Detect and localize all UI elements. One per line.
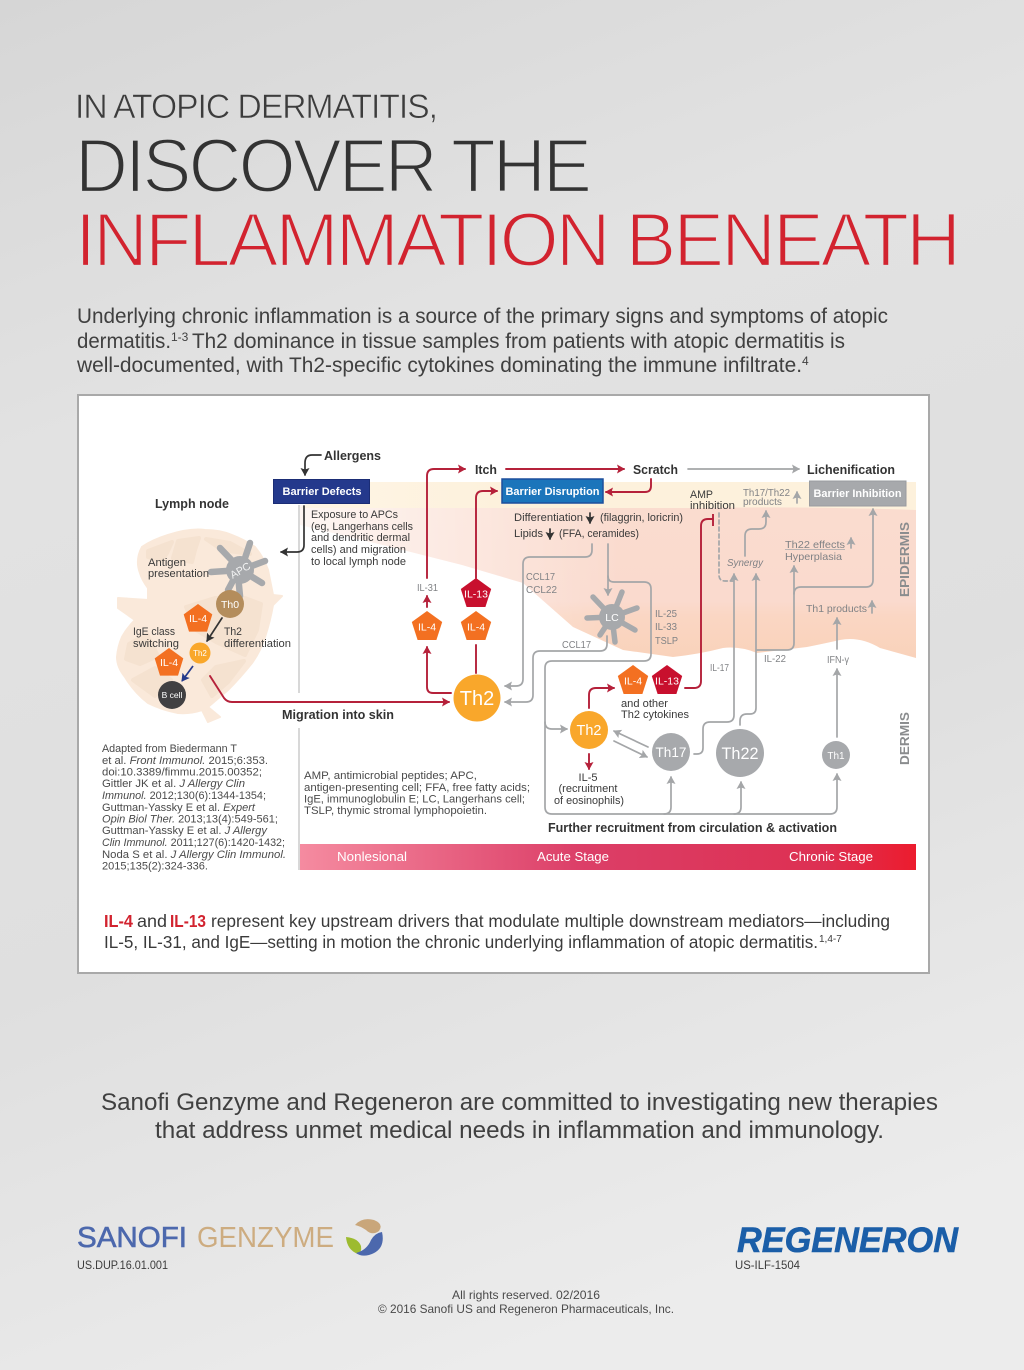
text: AMP inhibition (690, 489, 735, 512)
text: exposure to APCs: (eg, Langerhans cells (311, 521, 413, 533)
logo: Regeneron: REGENERON (737, 1221, 959, 1260)
references: Clin Immunol. 2011;127(6):1420-1432; (102, 837, 285, 849)
lymph node labels: IgE class (133, 626, 175, 638)
text: exposure to APCs: to local lymph node (311, 556, 406, 568)
lymph node labels: Th2 (224, 626, 242, 638)
box: barrier defects: Barrier Defects (282, 486, 362, 498)
labels: chemokines (526, 571, 678, 651)
icon: LC cell: LC (605, 612, 619, 624)
intro paragraph: 4 (802, 354, 809, 368)
logo: Sanofi Genzyme: GENZYME (197, 1222, 334, 1254)
labels: chemokines: CCL17 (526, 571, 555, 583)
callout: key drivers text: IL-5, IL-31, and IgE—setting in motion the chronic underlying inflammation of atopic dermatitis. (104, 932, 818, 952)
text: IL-5 recruitment (554, 772, 624, 807)
text: and other Th2 cytokines: Th2 cytokines (621, 709, 689, 721)
pentagon: IL-4 right (461, 611, 491, 640)
text: epidermis mediator labels: IL-17 (710, 662, 729, 674)
lymph node labels: presentation (148, 568, 209, 580)
logo: Sanofi Genzyme (77, 1219, 383, 1256)
label: further recruitment: Further recruitment from circulation & activation (548, 821, 837, 835)
arrow: exposure to lymph node (281, 506, 304, 552)
cell: B cell (158, 681, 186, 709)
references: Guttman-Yassky E et al. J Allergy (102, 825, 269, 837)
lymph node labels: Antigen (148, 557, 186, 569)
cell: small Th2 (190, 642, 210, 664)
heading row: itch scratch lichenification: Lichenification (807, 463, 895, 477)
arrow: Th0 to Th2 (207, 618, 222, 641)
pentagon: IL-4 lower: IL-4 (624, 676, 642, 688)
box: barrier disruption (502, 479, 603, 503)
text: AMP inhibition: inhibition (690, 500, 735, 512)
cell: Th17 (652, 733, 690, 771)
cell: B cell: B cell (162, 690, 182, 700)
text: epidermis mediator labels: Th22 effects (785, 539, 845, 551)
callout: key drivers text: IL-4 (104, 911, 133, 931)
callout: key drivers text: represent key upstream drivers that modulate multiple downstream mediators—including (211, 911, 890, 931)
pentagon: IL-13 lower (652, 665, 682, 694)
callout: key drivers text: 1,4-7 (819, 934, 842, 945)
cell: Th0 (216, 590, 244, 618)
pentagon: IL-4 lymph node upper (184, 604, 212, 632)
lymph node illustration (117, 530, 282, 722)
abbreviations: TSLP, thymic stromal lymphopoietin. (304, 805, 487, 817)
cell: Th0: Th0 (221, 599, 239, 611)
copyright: All rights reserved. 02/2016 (452, 1288, 600, 1302)
intro paragraph (76, 305, 888, 377)
title: INFLAMMATION BENEATH (75, 198, 958, 283)
text: differentiation and lipids (514, 512, 683, 540)
cell: small Th2: Th2 (193, 649, 207, 658)
title (75, 88, 958, 283)
cell: Th22 (716, 729, 764, 777)
text: epidermis mediator labels: Synergy (727, 557, 764, 569)
pentagon: IL-4 lymph node upper: IL-4 (189, 613, 207, 625)
cell: Th22: Th22 (722, 744, 758, 763)
cell: large Th2: Th2 (460, 688, 494, 710)
intro paragraph: Th2 dominance in tissue samples from patients with atopic dermatitis is (192, 330, 845, 353)
stage bar: Nonlesional (337, 849, 407, 864)
references: doi:10.3389/fimmu.2015.00352; (102, 766, 262, 778)
text: IL-5 recruitment: of eosinophils) (554, 795, 624, 807)
labels: chemokines: IL-25 (655, 608, 677, 620)
icon: APC cell: APC (228, 560, 253, 581)
skin layers: epidermis background (300, 482, 916, 660)
text: epidermis mediator labels: IFN-γ (827, 654, 850, 666)
gray pathways: T cell mediators (694, 509, 873, 754)
box: barrier defects (274, 480, 370, 504)
commitment statement: that address unmet medical needs in inflammation and immunology. (155, 1117, 884, 1144)
cell: Th1: Th1 (827, 751, 845, 762)
pentagon: IL-4 right: IL-4 (467, 622, 485, 634)
references: Gittler JK et al. J Allergy Clin (102, 778, 245, 790)
references: Guttman-Yassky E et al. Expert (102, 802, 256, 814)
text: exposure to APCs: Exposure to APCs (311, 509, 398, 521)
references (102, 743, 286, 872)
arrow: migration into skin (210, 676, 449, 702)
pentagon: IL-4 left: IL-4 (418, 622, 436, 634)
abbreviations: AMP, antimicrobial peptides; APC, (304, 770, 477, 782)
cell: lower Th2: Th2 (576, 723, 602, 739)
text: exposure to APCs (311, 509, 413, 568)
pentagon: IL-4 lower (618, 665, 648, 694)
lymph node labels (133, 497, 291, 650)
text: epidermis mediator labels (710, 487, 872, 674)
callout: key drivers text (104, 911, 890, 952)
references: 2015;135(2):324-336. (102, 860, 208, 872)
copyright (378, 1288, 674, 1316)
commitment statement: Sanofi Genzyme and Regeneron are committed to investigating new therapies (101, 1089, 938, 1116)
text: epidermis mediator labels: products (743, 496, 782, 508)
pentagon: IL-13 lower: IL-13 (655, 676, 679, 688)
stage bar: Chronic Stage (789, 849, 873, 864)
pentagon: IL-13 upper (461, 578, 491, 607)
label: migration into skin: Migration into skin (282, 708, 394, 722)
vertical divider (298, 505, 300, 870)
references: et al. Front Immunol. 2015;6:353. (102, 755, 268, 767)
intro paragraph: Underlying chronic inflammation is a source of the primary signs and symptoms of atopic (77, 305, 888, 328)
text: exposure to APCs: cells) and migration (311, 544, 406, 556)
box: barrier inhibition (810, 481, 906, 506)
intro paragraph: dermatitis. (77, 330, 171, 353)
commitment statement (101, 1089, 938, 1144)
intro paragraph: 1-3 (171, 330, 189, 344)
text: epidermis mediator labels: IL-22 (764, 653, 786, 665)
box: barrier disruption: Barrier Disruption (506, 486, 600, 498)
callout: key drivers text: and (137, 911, 167, 931)
label: IL-31: IL-31 (417, 582, 438, 594)
labels: chemokines: TSLP (655, 635, 678, 647)
callout: key drivers text: IL-13 (170, 911, 206, 931)
red arrows: lower Th2 outputs (589, 514, 713, 769)
references: Noda S et al. J Allergy Clin Immunol. (102, 849, 286, 861)
copyright: © 2016 Sanofi US and Regeneron Pharmaceuticals, Inc. (378, 1302, 674, 1316)
panel: pathway diagram box (78, 395, 929, 973)
title: IN ATOPIC DERMATITIS, (75, 88, 437, 126)
lymph node labels: Lymph node (155, 497, 229, 511)
icon: LC cell (587, 592, 637, 642)
arrow: Th2 to B cell (182, 666, 193, 681)
heading row: itch scratch lichenification: Scratch (633, 463, 678, 477)
labels: chemokines: IL-33 (655, 621, 677, 633)
icon: APC cell (211, 543, 265, 596)
cell: Th1 (822, 741, 850, 769)
heading: allergens with arrow: Allergens (324, 449, 381, 463)
heading row: itch scratch lichenification: Itch (475, 463, 497, 477)
cell: Th17: Th17 (656, 744, 687, 760)
text: differentiation and lipids: (filaggrin, loricrin) (600, 512, 683, 524)
red arrows: cytokines to itch and barrier disruption (427, 469, 651, 693)
stage bar: Acute Stage (537, 849, 609, 864)
text: exposure to APCs: and dendritic dermal (311, 532, 410, 544)
pentagon: IL-4 left (412, 611, 442, 640)
intro paragraph: well-documented, with Th2-specific cytokines dominating the immune infiltrate. (76, 354, 802, 377)
lymph node labels: switching (133, 638, 179, 650)
text: epidermis mediator labels: Hyperplasia (785, 551, 842, 563)
code: Sanofi: US.DUP.16.01.001 (77, 1258, 168, 1272)
lymph node labels: differentiation (224, 638, 291, 650)
code: Regeneron: US-ILF-1504 (735, 1258, 800, 1272)
references: Opin Biol Ther. 2013;13(4):549-561; (102, 814, 278, 826)
cell: lower Th2 (570, 711, 608, 749)
pentagon: IL-4 lymph node lower (155, 648, 183, 676)
references: Adapted from Biedermann T (102, 743, 237, 755)
text: IL-5 recruitment: (recruitment (558, 783, 618, 795)
title: DISCOVER THE (75, 124, 589, 209)
text: and other Th2 cytokines (621, 698, 689, 721)
text: differentiation and lipids: (FFA, ceramides) (559, 528, 639, 540)
label: epidermis: EPIDERMIS (898, 522, 912, 597)
heading row: itch scratch lichenification (475, 463, 895, 477)
logo: Sanofi Genzyme: SANOFI (77, 1222, 187, 1254)
pentagon: IL-13 upper: IL-13 (464, 588, 488, 600)
text: differentiation and lipids: Differentiation (514, 512, 583, 524)
arrows: Th2 and Th17 exchange (614, 731, 648, 757)
text: epidermis mediator labels: Th17/Th22 (743, 487, 790, 499)
heading: allergens with arrow (305, 449, 381, 475)
pentagon: IL-4 lymph node lower: IL-4 (160, 657, 178, 669)
abbreviations: antigen-presenting cell; FFA, free fatty acids; (304, 782, 530, 794)
abbreviations: IgE, immunoglobulin E; LC, Langerhans cell; (304, 794, 525, 806)
gray pathways: chemokines and LC signals (505, 544, 837, 814)
labels: chemokines: CCL22 (526, 584, 557, 596)
abbreviations (304, 770, 530, 817)
text: AMP inhibition: AMP (690, 489, 713, 501)
label: dermis: DERMIS (898, 712, 912, 765)
text: and other Th2 cytokines: and other (621, 698, 668, 710)
text: differentiation and lipids: Lipids (514, 528, 543, 540)
references: Immunol. 2012;130(6):1344-1354; (102, 790, 266, 802)
stage bar (300, 844, 916, 870)
cell: large Th2 (454, 674, 500, 722)
labels: chemokines: CCL17 (562, 639, 591, 651)
text: epidermis mediator labels: Th1 products (806, 603, 867, 615)
box: barrier inhibition: Barrier Inhibition (814, 488, 902, 500)
text: IL-5 recruitment: IL-5 (579, 772, 597, 784)
